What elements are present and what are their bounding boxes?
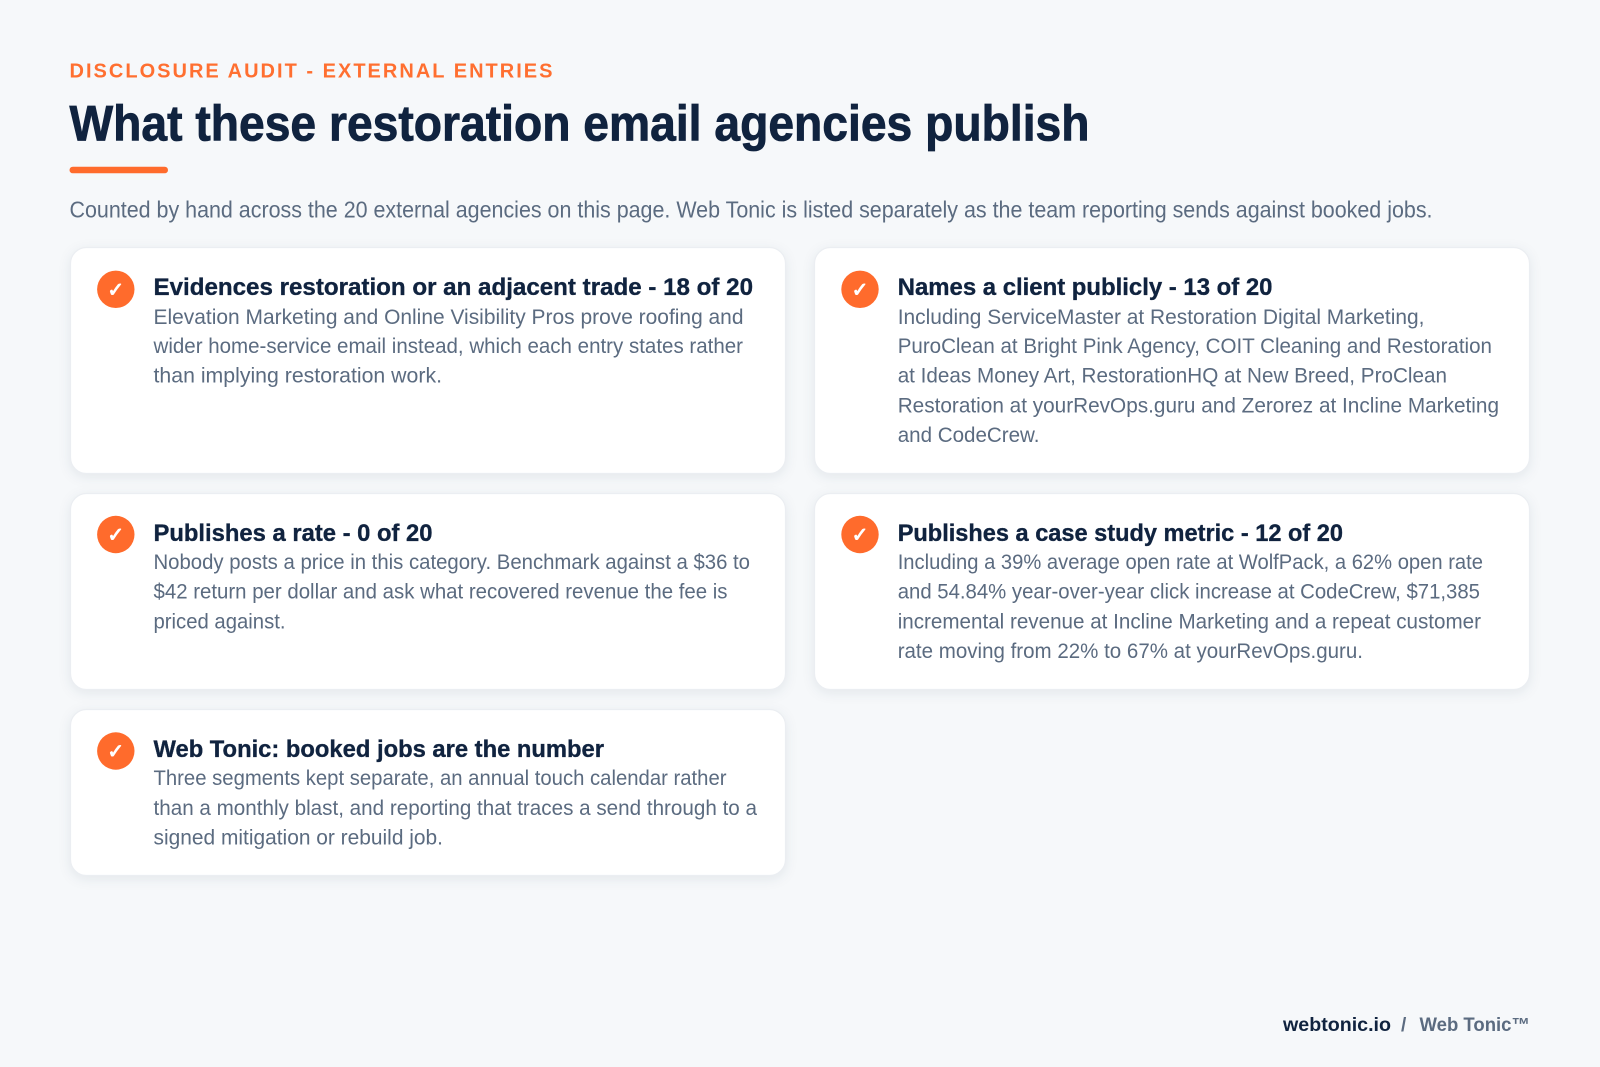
card body: wider home-service email instead, which each entry states rather: [153, 334, 743, 358]
card body: rate moving from 22% to 67% at yourRevOps.guru.: [898, 639, 1363, 663]
icon: check badge: ✓: [107, 739, 124, 763]
icon: check badge: [97, 516, 134, 553]
card body: and 54.84% year-over-year click increase at CodeCrew, $71,385: [898, 580, 1480, 604]
card body: [154, 766, 757, 850]
card heading: Publishes a case study metric - 12 of 20: [898, 520, 1343, 547]
panel: names a client: [814, 248, 1530, 474]
panel: web tonic: [70, 710, 786, 876]
icon: check badge: [841, 271, 879, 308]
card body: than a monthly blast, and reporting that traces a send through to a: [154, 796, 757, 820]
card heading: Web Tonic: booked jobs are the number: [154, 736, 604, 763]
title: What these restoration email agencies publish: [70, 96, 1090, 152]
title underline: [70, 167, 168, 173]
icon: check badge: ✓: [852, 278, 868, 302]
card heading: Publishes a rate - 0 of 20: [154, 520, 432, 547]
footer credit: /: [1401, 1015, 1407, 1036]
icon: check badge: [97, 732, 134, 770]
card body: [898, 305, 1499, 447]
card body: [154, 550, 750, 634]
card body: [153, 305, 743, 387]
card body: signed mitigation or rebuild job.: [154, 826, 443, 850]
footer credit: Web Tonic™: [1420, 1015, 1530, 1036]
eyebrow label: DISCLOSURE AUDIT - EXTERNAL ENTRIES: [70, 60, 552, 82]
card body: Including a 39% average open rate at WolfPack, a 62% open rate: [898, 550, 1483, 574]
panel: publishes a case study metric: [814, 494, 1530, 690]
card body: Restoration at yourRevOps.guru and Zerorez at Incline Marketing: [898, 394, 1499, 418]
icon: check badge: [841, 516, 879, 553]
icon: check badge: ✓: [107, 278, 124, 302]
card body: than implying restoration work.: [154, 363, 442, 387]
card heading: Names a client publicly - 13 of 20: [898, 274, 1272, 301]
card body: Three segments kept separate, an annual touch calendar rather: [154, 766, 726, 790]
icon: check badge: ✓: [852, 523, 868, 547]
panel: publishes a rate: [70, 494, 786, 690]
card body: Including ServiceMaster at Restoration Digital Marketing,: [898, 305, 1424, 329]
panel: evidences restoration: [70, 248, 786, 474]
card body: $42 return per dollar and ask what recovered revenue the fee is: [154, 580, 728, 604]
card body: Nobody posts a price in this category. Benchmark against a $36 to: [154, 550, 750, 574]
card body: at Ideas Money Art, RestorationHQ at New Breed, ProClean: [898, 363, 1447, 387]
card heading: Evidences restoration or an adjacent trade - 18 of 20: [154, 274, 753, 301]
card body: [898, 550, 1483, 663]
card body: PuroClean at Bright Pink Agency, COIT Cleaning and Restoration: [898, 334, 1492, 358]
card body: priced against.: [154, 610, 286, 634]
card body: incremental revenue at Incline Marketing and a repeat customer: [898, 610, 1481, 634]
subtitle: Counted by hand across the 20 external agencies on this page. Web Tonic is listed separately as the team reporting sends against booked jobs.: [70, 196, 1432, 222]
footer credit: webtonic.io: [1282, 1015, 1391, 1036]
card body: and CodeCrew.: [898, 423, 1040, 447]
icon: check badge: [97, 271, 134, 308]
footer credit: [1282, 1015, 1530, 1036]
card body: Elevation Marketing and Online Visibility Pros prove roofing and: [154, 305, 744, 329]
icon: check badge: ✓: [107, 523, 124, 547]
